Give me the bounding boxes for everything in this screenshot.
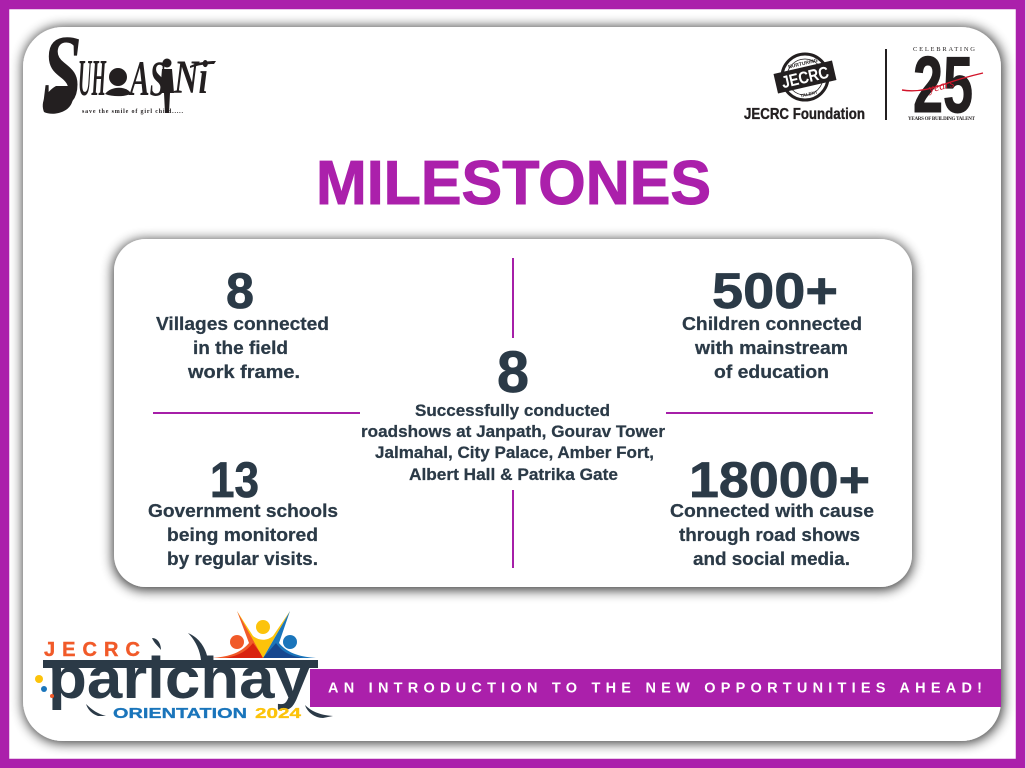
milestone: schools: 13 <box>210 452 259 508</box>
logo: Suhasini: UH <box>78 50 107 107</box>
milestone: children: Children connected <box>682 313 862 334</box>
logo: JECRC Foundation: JECRC Foundation <box>744 106 865 123</box>
logo: JECRC Parichay Orientation 2024: 2024 <box>255 705 302 722</box>
logo: Suhasini: S <box>42 14 82 129</box>
milestone: schools <box>148 452 338 569</box>
milestone: connected: through road shows <box>679 524 860 545</box>
milestone: children: with mainstream <box>694 337 848 358</box>
logo: celebrating 25 years: 25 <box>913 40 973 129</box>
panel: milestones <box>114 239 912 587</box>
milestone: roadshows: Jalmahal, City Palace, Amber Fort, <box>375 444 654 462</box>
icon: people <box>212 611 316 658</box>
logo: JECRC Parichay Orientation 2024: JECRC <box>44 639 140 661</box>
milestone: schools: by regular visits. <box>167 548 318 569</box>
milestone: connected <box>670 452 874 569</box>
seal: JECRC <box>780 63 831 92</box>
milestone: children: 500+ <box>712 263 838 319</box>
milestone: connected: 18000+ <box>689 452 870 508</box>
milestone: roadshows: Albert Hall & Patrika Gate <box>409 466 618 484</box>
logo: JECRC Foundation <box>744 54 865 123</box>
logo: Suhasini <box>42 14 216 129</box>
logo: celebrating 25 years: YEARS OF BUILDING TALENT <box>908 117 976 122</box>
logo: JECRC Parichay Orientation 2024: parichay <box>48 646 310 711</box>
title: MILESTONES <box>316 149 711 218</box>
logo: JECRC Parichay Orientation 2024 <box>35 611 333 722</box>
seal: TALENT <box>800 90 818 98</box>
divider between logos <box>885 49 887 120</box>
milestone: children <box>682 263 862 382</box>
milestone: schools: being monitored <box>167 524 318 545</box>
milestone: roadshows: 8 <box>497 340 529 405</box>
milestone: villages: 8 <box>226 263 254 319</box>
milestone: connected: and social media. <box>693 548 850 569</box>
logo: JECRC Parichay Orientation 2024: ORIENTATION <box>113 705 247 722</box>
milestone: villages: work frame. <box>187 361 300 382</box>
logo: Suhasini: Ni <box>173 51 208 104</box>
milestone: villages <box>156 263 329 382</box>
logo: celebrating 25 years: CELEBRATING <box>913 46 975 53</box>
milestone: children: of education <box>714 361 829 382</box>
logo: Suhasini: AS <box>128 50 166 106</box>
milestone: villages: Villages connected <box>156 313 329 334</box>
logo: Suhasini: save the smile of girl child..... <box>82 109 184 115</box>
seal: NURTURING <box>788 58 818 70</box>
milestone: roadshows <box>361 340 666 484</box>
milestone: roadshows: roadshows at Janpath, Gourav Tower <box>361 423 666 441</box>
milestone: roadshows: Successfully conducted <box>415 402 610 420</box>
logo: celebrating 25 years: years <box>926 76 956 96</box>
milestone: villages: in the field <box>193 337 288 358</box>
milestone: connected: Connected with cause <box>670 500 874 521</box>
banner: AN INTRODUCTION TO THE NEW OPPORTUNITIES AHEAD! <box>328 680 982 696</box>
seal <box>774 54 836 100</box>
milestone: schools: Government schools <box>148 500 338 521</box>
banner <box>310 669 1001 707</box>
